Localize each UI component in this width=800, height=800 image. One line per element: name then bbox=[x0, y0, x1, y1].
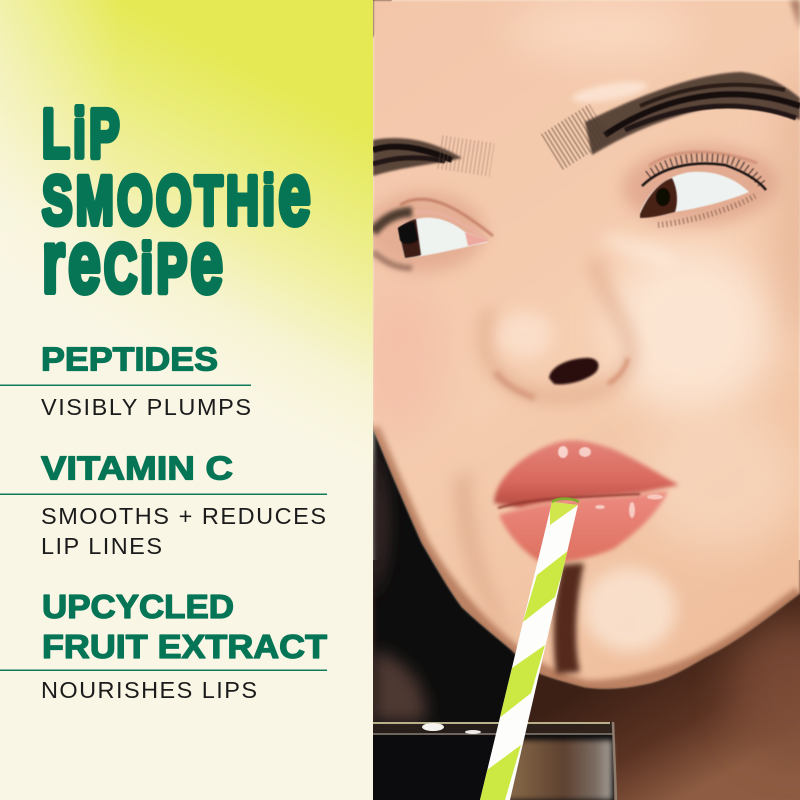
title: LiP bbox=[42, 96, 123, 172]
ingredient: vitamin c: VITAMIN C bbox=[41, 450, 233, 486]
right eyebrow bbox=[552, 72, 800, 155]
neck in shadow bbox=[373, 560, 800, 800]
title: SMOOTHie bbox=[42, 144, 314, 243]
upper right shade bbox=[790, 0, 800, 30]
nostril bbox=[549, 358, 598, 384]
left eye bbox=[373, 199, 493, 268]
drinking glass bbox=[373, 722, 616, 800]
jaw shading bbox=[373, 428, 800, 687]
ingredient: upcycled fruit extract bbox=[0, 588, 327, 703]
right eye bbox=[640, 152, 766, 225]
panel: gradient background bbox=[0, 0, 373, 800]
title bbox=[42, 96, 314, 311]
right cheek highlight bbox=[605, 245, 775, 415]
ingredient: upcycled fruit extract: UPCYCLED bbox=[42, 588, 234, 625]
right eye socket shading bbox=[620, 141, 780, 229]
left eyebrow bbox=[373, 138, 492, 176]
ingredient: vitamin c: SMOOTHS + REDUCES bbox=[41, 503, 326, 529]
photo: woman sipping through a straw bbox=[360, 0, 800, 800]
ingredient: upcycled fruit extract: FRUIT EXTRACT bbox=[42, 628, 327, 665]
chin highlight bbox=[584, 568, 676, 652]
ingredient: peptides bbox=[0, 340, 251, 420]
ingredient: vitamin c bbox=[0, 450, 327, 559]
left eye socket shading bbox=[365, 192, 485, 272]
straw bbox=[480, 502, 578, 800]
title: reCiPe bbox=[42, 212, 226, 311]
ingredient: peptides: PEPTIDES bbox=[41, 340, 218, 378]
cheek blush left bbox=[373, 298, 430, 444]
hair bbox=[373, 0, 525, 800]
ingredient: peptides: VISIBLY PLUMPS bbox=[41, 394, 251, 420]
forehead highlight bbox=[520, 2, 678, 62]
straw shadow on chin bbox=[554, 563, 584, 674]
ingredient: vitamin c: LIP LINES bbox=[41, 533, 162, 559]
cheek shading beside mouth bbox=[450, 472, 504, 624]
ingredient: upcycled fruit extract: NOURISHES LIPS bbox=[41, 677, 257, 703]
brow highlight bbox=[572, 80, 648, 104]
face bbox=[360, 0, 800, 688]
lips bbox=[494, 440, 679, 562]
nose bbox=[485, 260, 630, 398]
